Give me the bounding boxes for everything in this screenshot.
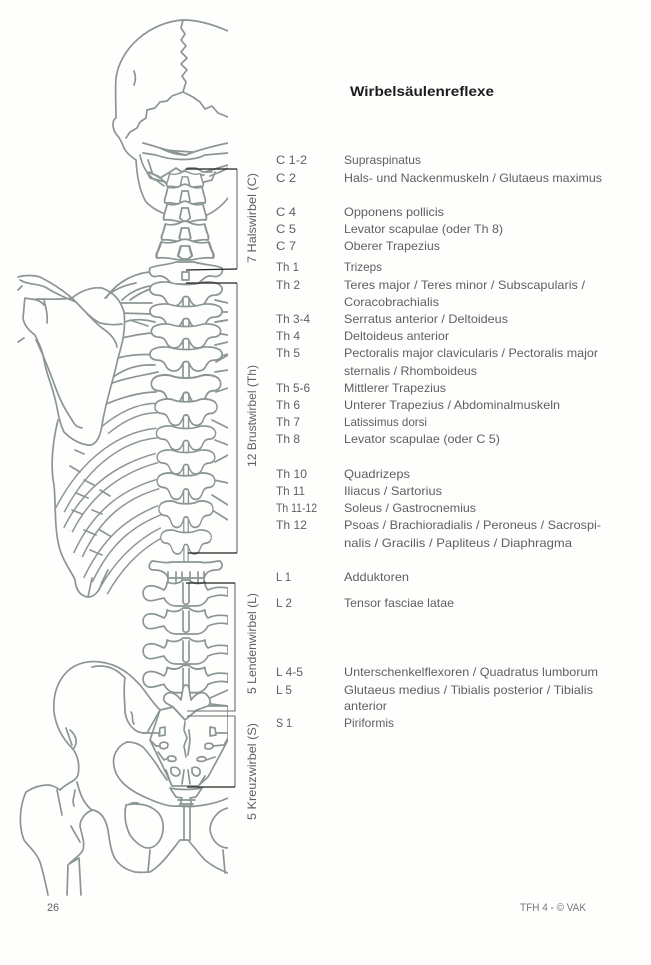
reflex table: vertebra column: Th 5-6 <box>276 381 310 395</box>
reflex table: muscle column: nalis / Gracilis / Papliteus / Diaphragma <box>344 536 572 550</box>
reflex table: vertebra column: L 4-5 <box>276 665 303 679</box>
reflex table: muscle column: Psoas / Brachioradialis / Peroneus / Sacrospi- <box>344 518 601 532</box>
ilium and hip <box>20 662 228 895</box>
reflex table: muscle column: Levator scapulae (oder C 5) <box>344 432 500 446</box>
reflex table: muscle column: Latissimus dorsi <box>344 415 427 429</box>
thoracic vertebrae <box>149 282 222 590</box>
reflex table: vertebra column: Th 12 <box>276 518 307 532</box>
label: thoracic vertebrae: 12 Brustwirbel (Th) <box>245 365 259 467</box>
reflex table: vertebra column: C 1-2 <box>276 153 307 167</box>
skull <box>113 20 228 216</box>
reflex table: vertebra column: Th 6 <box>276 398 300 412</box>
reflex table: vertebra column: Th 3-4 <box>276 312 310 326</box>
reflex table: muscle column: Soleus / Gastrocnemius <box>344 501 476 515</box>
reflex table: muscle column: Tensor fasciae latae <box>344 596 454 610</box>
reflex table: muscle column: Serratus anterior / Deltoideus <box>344 312 508 326</box>
reflex table: muscle column: Deltoideus anterior <box>344 329 449 343</box>
reflex table: vertebra column: C 2 <box>276 171 296 185</box>
ribs <box>52 300 228 597</box>
page number: 26 <box>47 902 59 914</box>
reflex table: vertebra column: Th 7 <box>276 415 300 429</box>
reflex table: muscle column: sternalis / Rhomboideus <box>344 364 477 378</box>
reflex table: muscle column: anterior <box>344 699 387 713</box>
reflex table: muscle column: Pectoralis major clavicularis / Pectoralis major <box>344 346 598 360</box>
reflex table: vertebra column: L 5 <box>276 683 292 697</box>
reflex table: muscle column: Levator scapulae (oder Th 8) <box>344 222 503 236</box>
reflex table: vertebra column: Th 10 <box>276 467 307 481</box>
skeleton illustration <box>18 20 228 895</box>
reflex table: muscle column: Coracobrachialis <box>344 295 439 309</box>
reflex table: vertebra column: Th 11-12 <box>276 501 317 515</box>
reflex table: vertebra column: Th 1 <box>276 260 299 274</box>
reflex table: muscle column: Unterschenkelflexoren / Quadratus lumborum <box>344 665 598 679</box>
scapula and shoulder <box>17 271 150 446</box>
label: sacral vertebrae: 5 Kreuzwirbel (S) <box>245 723 259 820</box>
title: Wirbelsäulenreflexe <box>350 83 494 99</box>
reflex table: muscle column: Glutaeus medius / Tibialis posterior / Tibialis <box>344 683 593 697</box>
bracket: cervical vertebrae <box>186 169 237 270</box>
reflex table: muscle column: Mittlerer Trapezius <box>344 381 446 395</box>
lumbar vertebrae <box>143 580 228 720</box>
reflex table: muscle column: Supraspinatus <box>344 153 421 167</box>
reflex table: muscle column: Unterer Trapezius / Abdominalmuskeln <box>344 398 560 412</box>
copyright footer: TFH 4 - © VAK <box>520 902 587 914</box>
reflex table: vertebra column: C 7 <box>276 239 296 253</box>
reflex table: vertebra column: Th 4 <box>276 329 300 343</box>
reflex table: muscle column: Iliacus / Sartorius <box>344 484 442 498</box>
reflex table: muscle column <box>344 153 602 730</box>
label: lumbar vertebrae: 5 Lendenwirbel (L) <box>245 593 259 694</box>
reflex table: vertebra column: Th 5 <box>276 346 300 360</box>
reflex table: muscle column: Hals- und Nackenmuskeln / Glutaeus maximus <box>344 171 602 185</box>
reflex table: muscle column: Teres major / Teres minor / Subscapularis / <box>344 278 586 292</box>
reflex table: vertebra column: Th 8 <box>276 432 300 446</box>
reflex table: muscle column: Quadrizeps <box>344 467 410 481</box>
coccyx and symphysis <box>170 788 202 840</box>
bracket: lumbar vertebrae <box>186 583 235 711</box>
reflex table: vertebra column: C 5 <box>276 222 296 236</box>
reflex table: muscle column: Opponens pollicis <box>344 205 444 219</box>
reflex table: muscle column: Oberer Trapezius <box>344 239 440 253</box>
reflex table: muscle column: Trizeps <box>344 260 382 274</box>
reflex table: vertebra column: Th 2 <box>276 278 300 292</box>
bracket: thoracic vertebrae <box>186 283 237 553</box>
reflex table: muscle column: Adduktoren <box>344 570 409 584</box>
label: cervical vertebrae: 7 Halswirbel (C) <box>245 173 259 263</box>
reflex table: vertebra column: L 2 <box>276 596 292 610</box>
cervical vertebrae <box>147 168 222 284</box>
reflex table: vertebra column: C 4 <box>276 205 296 219</box>
reflex table: vertebra column: L 1 <box>276 570 291 584</box>
reflex table: vertebra column: S 1 <box>276 716 292 730</box>
reflex table: vertebra column <box>276 153 317 730</box>
reflex table: muscle column: Piriformis <box>344 716 394 730</box>
sacrum <box>143 706 228 786</box>
bracket: sacral vertebrae <box>187 716 235 787</box>
reflex table: vertebra column: Th 11 <box>276 484 305 498</box>
